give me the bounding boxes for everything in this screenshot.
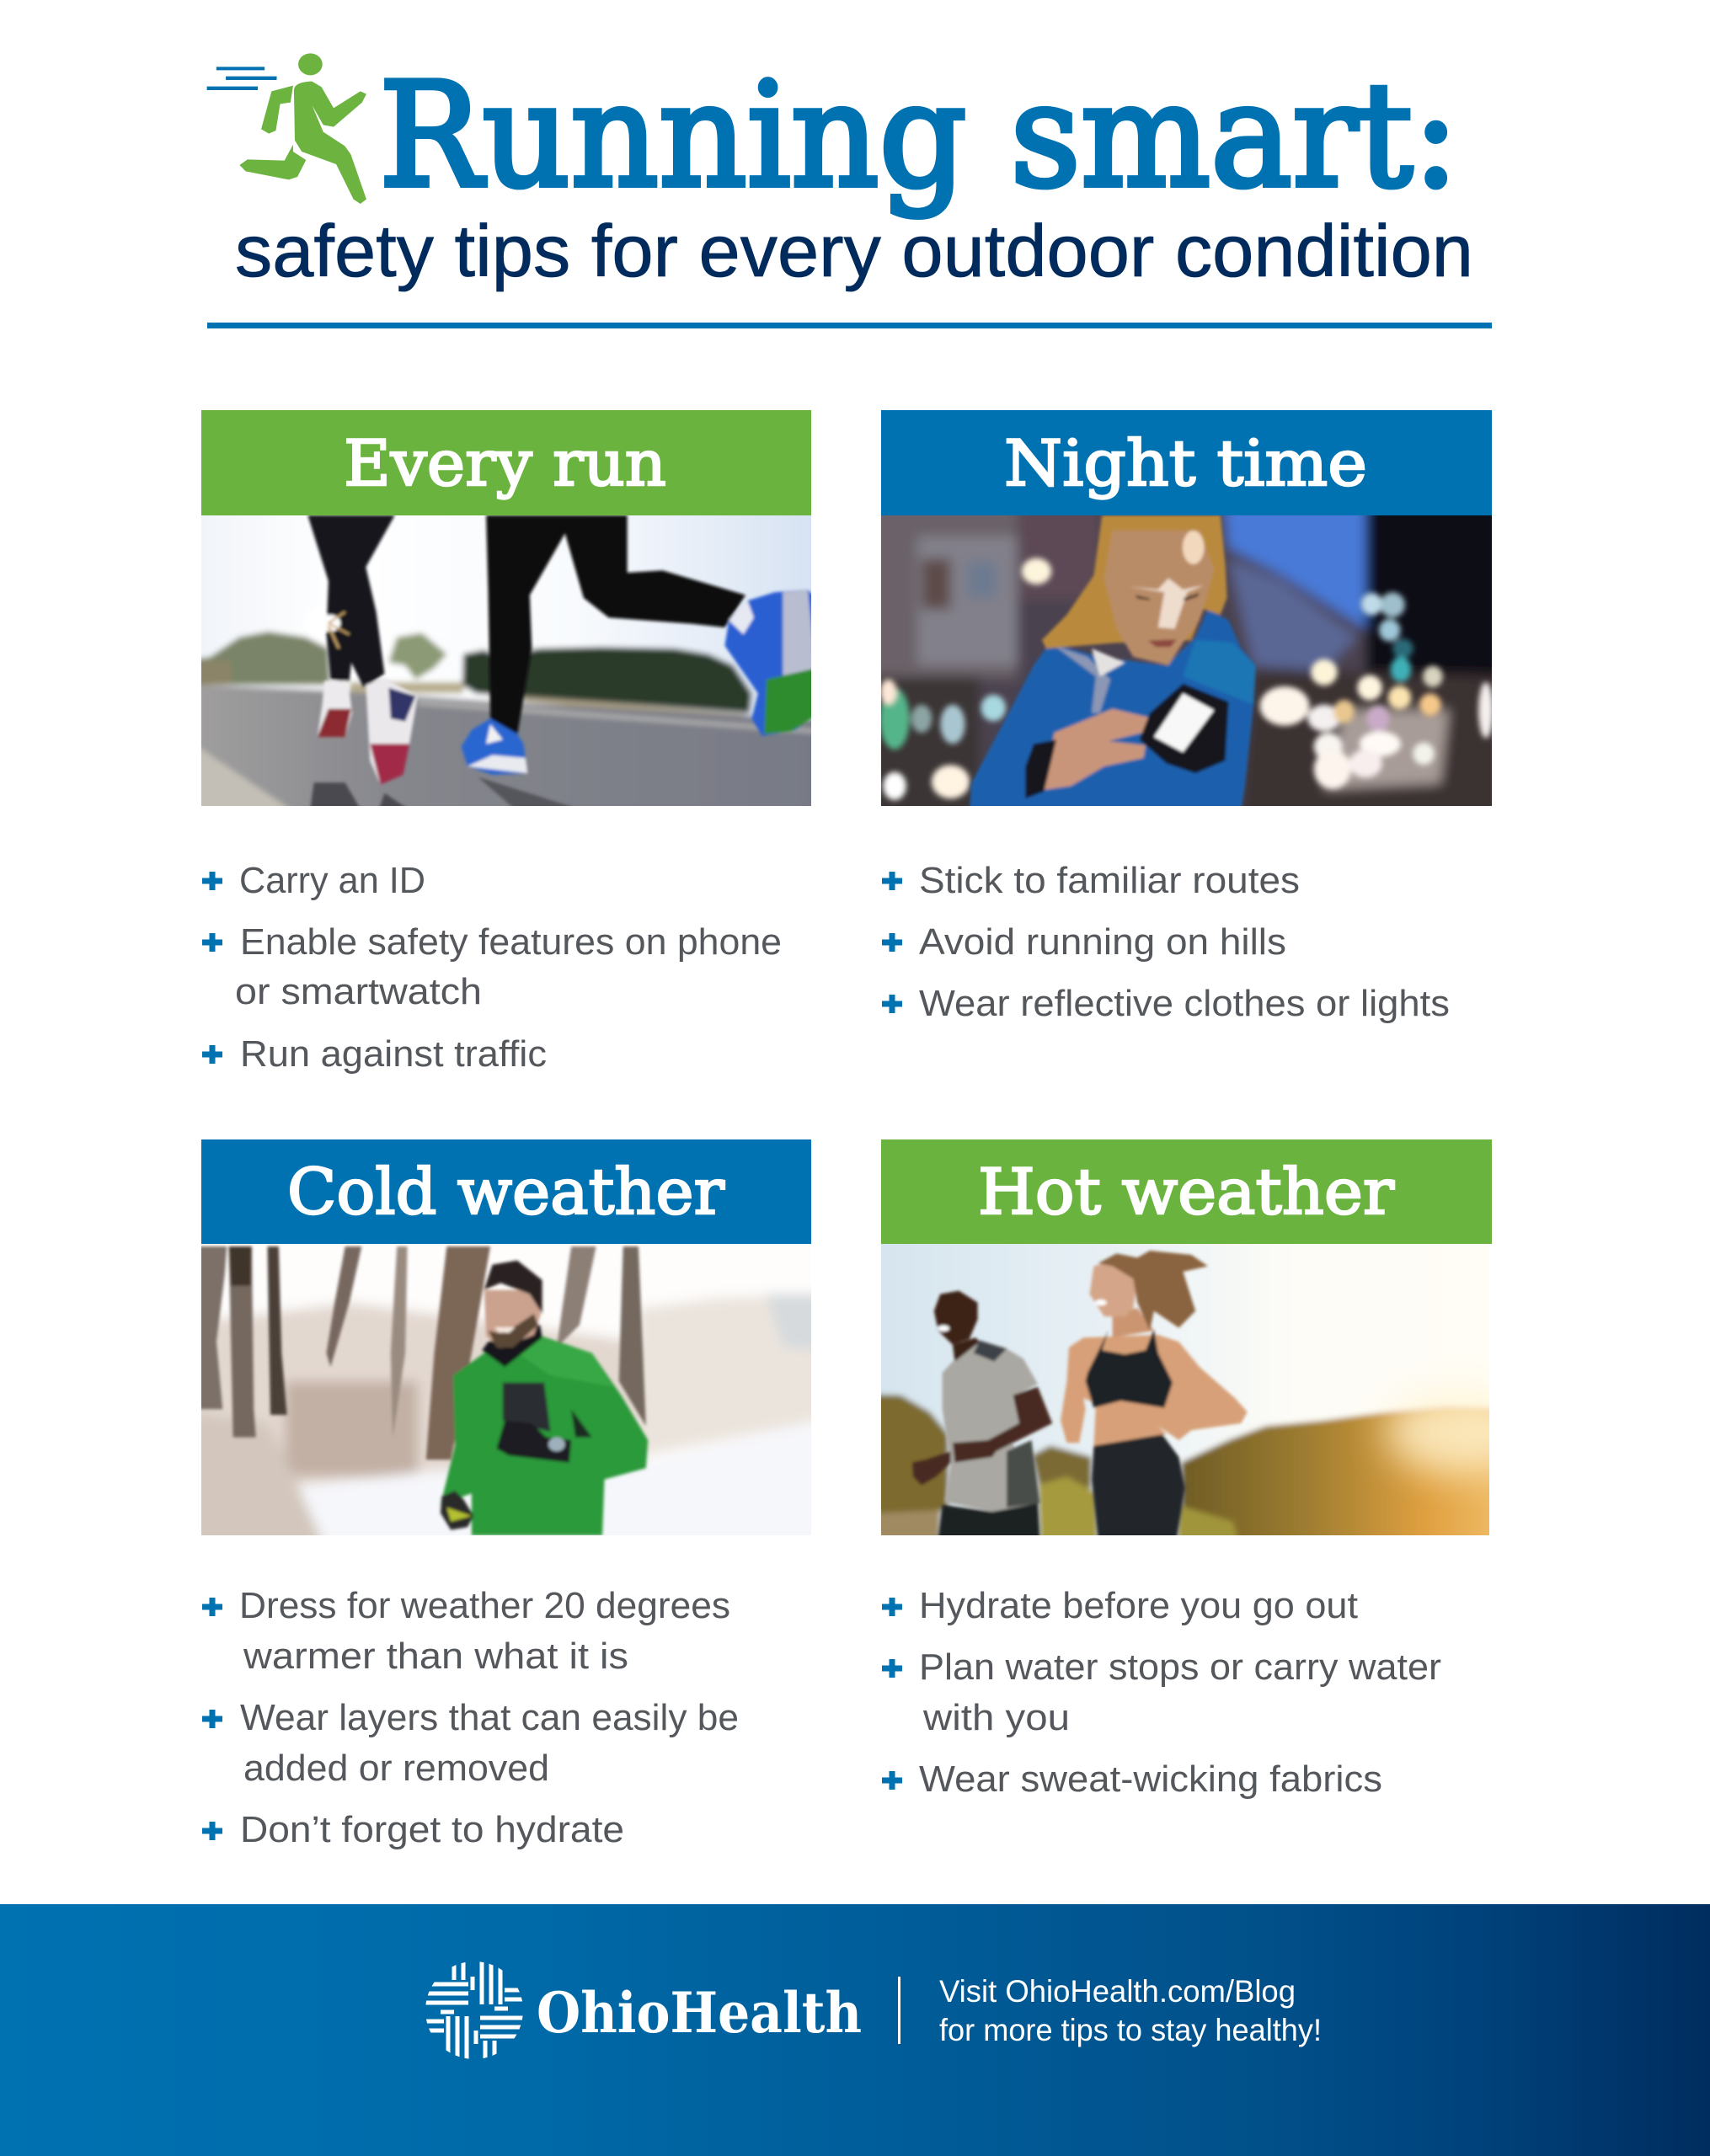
call to action text (939, 1974, 1322, 2047)
photo: man in green jacket running in snow (201, 1244, 811, 1535)
panel: every run (168, 410, 849, 1075)
tip: carry an id: Carry an ID (239, 860, 425, 901)
tip: enable safety features (202, 921, 782, 1012)
tip: wear layers: Wear layers that can easily be (240, 1697, 739, 1738)
tip: plan water stops (882, 1646, 1441, 1738)
tip: wear sweat-wicking fabrics: Wear sweat-wicking fabrics (919, 1758, 1382, 1800)
photo: man and woman jogging in sunshine (881, 1244, 1489, 1535)
tip: dress for weather: warmer than what it is (243, 1636, 628, 1677)
tip: wear reflective clothes: Wear reflective clothes or lights (919, 983, 1450, 1024)
tip: stick to familiar routes: Stick to familiar routes (919, 860, 1300, 901)
tip: don't forget to hydrate: Don’t forget to hydrate (240, 1809, 624, 1850)
panel: night time (881, 410, 1492, 1023)
panel: hot weather (881, 1139, 1492, 1799)
tip: plan water stops: with you (922, 1697, 1070, 1738)
header: night time (881, 410, 1492, 515)
tip: hydrate before: Hydrate before you go out (919, 1585, 1358, 1626)
sun glow (1386, 1390, 1529, 1474)
call to action text: Visit OhioHealth.com/Blog (939, 1974, 1296, 2009)
photo: two runners' legs on a road (201, 515, 811, 806)
title rule (207, 323, 1492, 328)
header: night time: Night time (1004, 426, 1367, 500)
icon: green runner with speed lines (207, 53, 366, 204)
tip: enable safety features: Enable safety features on phone (240, 921, 782, 963)
heading: Running smart: Running smart: (379, 52, 1459, 220)
icon: OhioHealth woven logo (425, 1961, 523, 2059)
tip: plan water stops: Plan water stops or carry water (919, 1646, 1441, 1688)
call to action text: for more tips to stay healthy! (939, 2013, 1322, 2047)
panel: cold weather (168, 1139, 849, 1850)
subheading: safety tips for every outdoor condition (235, 211, 1473, 292)
tip: avoid running on hills: Avoid running on hills (919, 921, 1286, 963)
header: cold weather (201, 1139, 811, 1244)
header: hot weather: Hot weather (978, 1155, 1394, 1229)
header: every run (201, 410, 811, 515)
tip: run against traffic: Run against traffic (240, 1033, 547, 1075)
logo wordmark: OhioHealth (537, 1980, 862, 2046)
tip: wear layers (202, 1697, 739, 1789)
tip: wear layers: added or removed (243, 1748, 549, 1789)
footer divider (898, 1977, 900, 2044)
photo: woman checking phone armband at night (881, 515, 1492, 806)
tip: dress for weather (202, 1585, 730, 1677)
tip: dress for weather: Dress for weather 20 degrees (239, 1585, 730, 1626)
tip: enable safety features: or smartwatch (235, 971, 482, 1012)
header: every run: Every run (344, 426, 666, 500)
header: cold weather: Cold weather (287, 1155, 724, 1229)
title block (207, 52, 1492, 328)
header: hot weather (881, 1139, 1492, 1244)
footer band (0, 1904, 1710, 2156)
